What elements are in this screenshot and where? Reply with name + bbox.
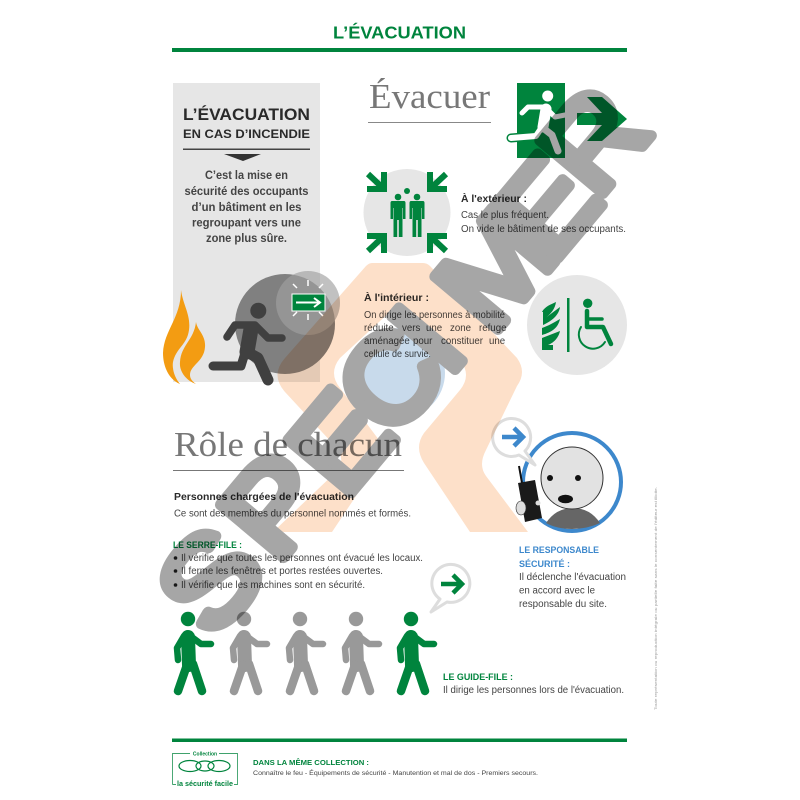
title bbox=[172, 22, 627, 52]
text: inside: une bbox=[489, 336, 505, 347]
logo: collection bbox=[172, 752, 238, 788]
definition text: C’est la mise en bbox=[205, 170, 288, 182]
footer text: DANS LA MÊME COLLECTION : bbox=[253, 758, 369, 767]
text: inside: réduite bbox=[364, 323, 394, 334]
text: inside: vers bbox=[402, 323, 420, 334]
text: serre-file bbox=[173, 540, 423, 591]
text: safety officer: responsable du site. bbox=[519, 599, 607, 610]
panel heading: EN CAS D’INCENDIE bbox=[183, 129, 310, 141]
text: people in charge bbox=[174, 491, 411, 520]
definition text bbox=[184, 170, 308, 245]
text: safety officer bbox=[519, 545, 626, 610]
icon: person running to exit sign bbox=[213, 271, 340, 380]
watermark letters: E bbox=[263, 367, 419, 517]
text: serre-file: Il vérifie que toutes les personnes ont évacué les locaux. bbox=[181, 553, 423, 564]
radio bbox=[516, 466, 542, 522]
text: inside: refuge bbox=[479, 323, 506, 334]
text: outside bbox=[461, 192, 626, 235]
text: inside: zone bbox=[450, 323, 471, 334]
running figure bbox=[213, 303, 282, 380]
text: safety officer: LE RESPONSABLE bbox=[519, 545, 599, 556]
footer rule bbox=[172, 738, 627, 742]
text: serre-file: Il vérifie que les machines sont en sécurité. bbox=[181, 580, 365, 591]
text: safety officer: SÉCURITÉ : bbox=[519, 559, 570, 570]
definition text: sécurité des occupants bbox=[184, 186, 308, 198]
exit sign bbox=[292, 280, 325, 320]
logo: collection: la sécurité facile bbox=[177, 781, 233, 788]
text: inside: On dirige les personnes à mobilité bbox=[364, 310, 505, 321]
text: inside: À l'intérieur : bbox=[364, 291, 429, 304]
definition text: d’un bâtiment en les bbox=[192, 202, 302, 214]
watermark letters: M bbox=[408, 183, 582, 354]
speech bubble: green arrow bbox=[431, 564, 470, 612]
text: guide-file: Il dirige les personnes lors de l'évacuation. bbox=[443, 685, 624, 696]
text: people in charge: Ce sont des membres du personnel nommés et formés. bbox=[174, 508, 411, 520]
definition text: regroupant vers une bbox=[192, 218, 301, 230]
logo: collection: Collection bbox=[193, 752, 217, 758]
panel: definition bbox=[173, 83, 320, 382]
text: inside: pour bbox=[413, 336, 433, 347]
icon: emergency exit sign bbox=[511, 83, 627, 158]
watermark letters: C bbox=[310, 302, 471, 458]
text: outside: On vide le bâtiment de ses occupants. bbox=[461, 224, 626, 235]
text: inside: constituer bbox=[441, 336, 484, 347]
legal notice: Toute représentation ou reproduction intégrale ou partielle faite sans le consentement de l'éditeur est illicite. bbox=[654, 487, 658, 710]
watermark circle bbox=[355, 328, 445, 418]
watermark letters: R bbox=[514, 62, 675, 218]
footer text: Connaître le feu - Équipements de sécurité - Manutention et mal de dos - Premiers secours. bbox=[253, 768, 538, 777]
text: serre-file: Il ferme les fenêtres et portes restées ouvertes. bbox=[181, 566, 383, 577]
text: safety officer: en accord avec le bbox=[519, 586, 595, 596]
watermark letters: S bbox=[130, 502, 290, 657]
text: guide-file bbox=[443, 672, 624, 696]
icon: refuge and wheelchair bbox=[527, 275, 627, 375]
text: outside: Cas le plus fréquent. bbox=[461, 210, 549, 221]
walking figures: serre-file, people, guide-file bbox=[177, 612, 434, 691]
watermark: specimen bbox=[130, 62, 675, 657]
heading: Évacuer: Évacuer bbox=[369, 77, 490, 116]
text: inside: une bbox=[426, 323, 442, 334]
panel heading bbox=[183, 105, 310, 161]
text: inside bbox=[364, 291, 506, 360]
text: guide-file: LE GUIDE-FILE : bbox=[443, 672, 513, 683]
title: L’ÉVACUATION bbox=[333, 22, 466, 42]
wheelchair symbol bbox=[579, 299, 611, 349]
heading: Rôle de chacun: Rôle de chacun bbox=[174, 425, 402, 464]
icon: flames bbox=[163, 290, 205, 384]
watermark letters: P bbox=[194, 427, 354, 582]
speech bubble: blue arrow bbox=[493, 418, 535, 465]
flame symbol bbox=[542, 302, 560, 350]
text: inside: aménagée bbox=[364, 336, 410, 347]
icon: safety officer with radio bbox=[493, 418, 621, 531]
watermark letters bbox=[130, 62, 675, 657]
text: people in charge: Personnes chargées de l'évacuation bbox=[174, 491, 354, 503]
footer text bbox=[253, 758, 538, 777]
icon: assembly point bbox=[364, 169, 450, 256]
definition text: zone plus sûre. bbox=[206, 233, 287, 245]
panel heading: L’ÉVACUATION bbox=[183, 105, 310, 124]
watermark emblem bbox=[273, 263, 528, 532]
text: safety officer: Il déclenche l'évacuation bbox=[519, 572, 626, 583]
watermark letters: I bbox=[365, 283, 489, 395]
text: inside: cellule de survie. bbox=[364, 349, 431, 360]
text: outside: À l'extérieur : bbox=[461, 192, 527, 205]
watermark letters: E bbox=[470, 132, 626, 282]
text: serre-file: LE SERRE-FILE : bbox=[173, 540, 242, 551]
